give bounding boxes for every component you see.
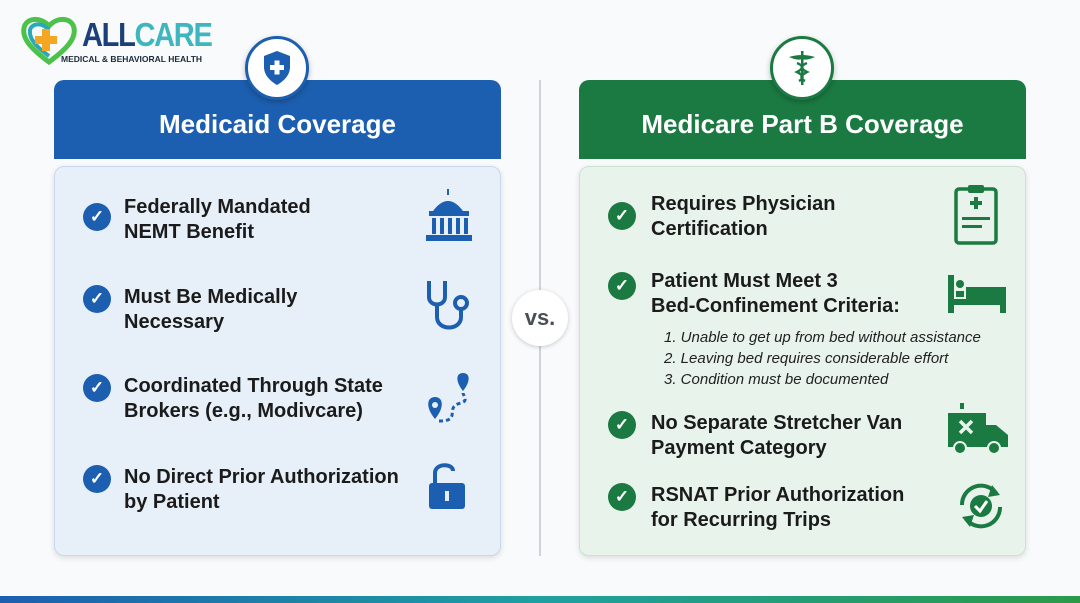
list: medicaid items: ✓ [90, 378, 104, 397]
list: medicare items: Patient Must Meet 3 [651, 270, 838, 292]
panel: medicare [578, 35, 1028, 560]
vs badge [512, 290, 568, 346]
list: medicaid items [54, 166, 501, 556]
list: medicaid items: No Direct Prior Authorization [124, 466, 399, 488]
list: medicare items: No Separate Stretcher Van [651, 412, 902, 434]
vs badge: vs. [525, 305, 555, 330]
list: medicare items: ✓ [615, 276, 629, 295]
panel: medicaid [52, 35, 502, 560]
logo [21, 16, 212, 65]
list: medicaid items: ✓ [90, 469, 104, 488]
icon: caduceus badge [770, 36, 834, 100]
list: medicare items: ✓ [615, 415, 629, 434]
list: medicare items: Payment Category [651, 437, 827, 459]
list: medicaid items: Coordinated Through State [124, 375, 383, 397]
heading: medicare: Medicare Part B Coverage [641, 109, 964, 139]
icon: heart with cross [21, 16, 77, 65]
icon: shield badge [245, 36, 309, 100]
heading: medicaid [54, 80, 501, 159]
list: medicare items: 2. Leaving bed requires considerable effort [664, 350, 948, 367]
list: medicaid items: Federally Mandated [124, 196, 311, 218]
list: medicare items: ✓ [615, 206, 629, 225]
list: medicaid items: Brokers (e.g., Modivcare) [124, 400, 363, 422]
list: medicare items: 3. Condition must be documented [664, 371, 888, 388]
list: medicare items: RSNAT Prior Authorization [651, 484, 904, 506]
list: medicaid items: by Patient [124, 491, 220, 513]
list: medicare items: for Recurring Trips [651, 509, 831, 531]
list: medicare items: Bed-Confinement Criteria: [651, 295, 900, 317]
list: medicaid items: Necessary [124, 311, 224, 333]
divider [539, 80, 541, 556]
list: medicare items: Requires Physician [651, 193, 836, 215]
list: medicare items: Certification [651, 218, 768, 240]
list: medicare items: 1. Unable to get up from bed without assistance [664, 329, 981, 346]
heading: medicaid: Medicaid Coverage [159, 109, 396, 139]
list: medicare items: ✓ [615, 487, 629, 506]
list: medicaid items: NEMT Benefit [124, 221, 254, 243]
list: medicaid items: Must Be Medically [124, 286, 297, 308]
list: medicaid items: ✓ [90, 289, 104, 308]
list: medicare items [579, 166, 1026, 556]
list: medicaid items: ✓ [90, 207, 104, 226]
bottom gradient bar [0, 596, 1080, 603]
logo: MEDICAL & BEHAVIORAL HEALTH [61, 54, 202, 64]
logo: ALLCARE [82, 16, 212, 53]
heading: medicare [579, 80, 1026, 159]
